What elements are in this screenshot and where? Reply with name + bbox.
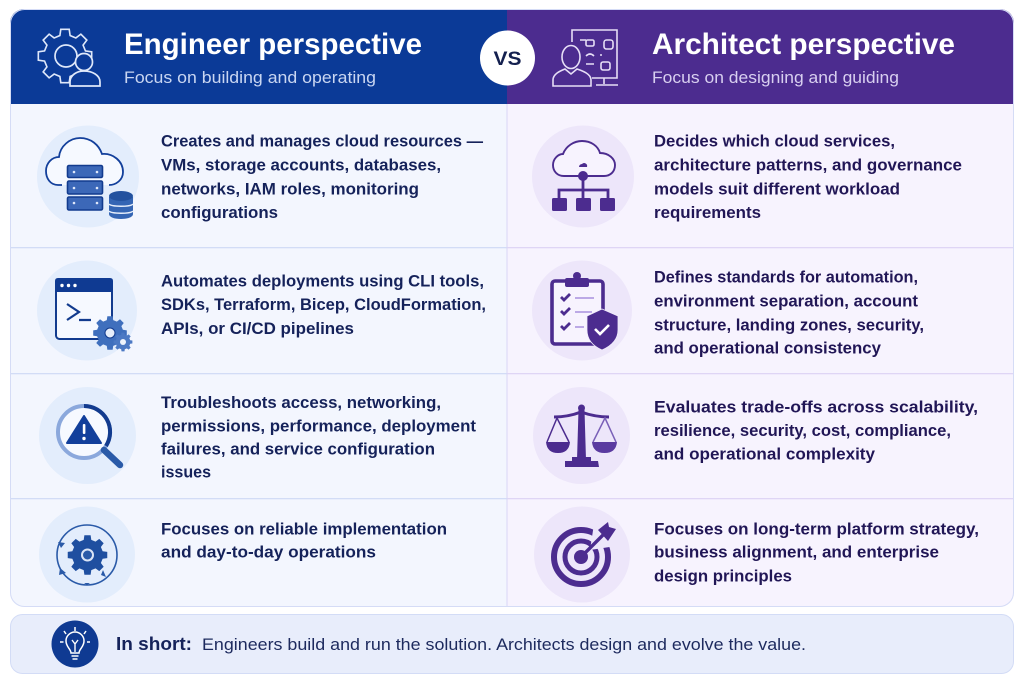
text: troubleshoots: failures, and service configuration (161, 440, 435, 458)
text: automates deployments: APIs, or CI/CD pipelines (161, 320, 354, 338)
icon: terminal window with gears (37, 260, 137, 360)
text: reliable implementation: Focuses on reliable implementation (161, 520, 447, 538)
text: creates and manages: Creates and manages cloud resources — (161, 132, 483, 150)
panel: engineer header (38, 28, 422, 87)
text: decides: architecture patterns, and governance (654, 156, 962, 174)
text: defines standards: and operational consistency (654, 340, 882, 358)
text: evaluates trade-offs (654, 398, 978, 464)
text: creates and manages: VMs, storage accounts, databases, (161, 156, 441, 174)
subheading: architect focus: Focus on designing and guiding (652, 69, 899, 87)
text: creates and manages (161, 132, 483, 222)
engineer row 2 (37, 260, 486, 360)
text: decides: models suit different workload (654, 180, 900, 198)
text: decides: Decides which cloud services, (654, 132, 895, 150)
text: creates and manages: configurations (161, 204, 278, 222)
text: reliable implementation: and day-to-day operations (161, 544, 376, 562)
architect row 2 (532, 260, 924, 360)
icon: cloud hierarchy (532, 126, 634, 228)
icon: magnifier with warning (39, 387, 136, 484)
icon: gear in cycle (39, 506, 135, 602)
text: automates deployments: SDKs, Terraform, Bicep, CloudFormation, (161, 296, 486, 314)
text: evaluates trade-offs: resilience, security, cost, compliance, (654, 422, 951, 440)
text: automates deployments (161, 272, 486, 338)
architect row 1 (532, 126, 962, 228)
text: summary sentence: Engineers build and run the solution. Architects design and evolve the value. (202, 636, 806, 654)
text: defines standards (654, 268, 924, 358)
text: creates and manages: networks, IAM roles, monitoring (161, 180, 419, 198)
architect row 4 (534, 506, 979, 602)
icon: balance scale (533, 387, 630, 484)
text: reliable implementation (161, 520, 447, 562)
text: evaluates trade-offs: Evaluates trade-offs across scalability, (654, 398, 978, 416)
engineer row 3 (39, 387, 477, 484)
heading: engineer perspective: Engineer perspective (124, 28, 422, 61)
text: evaluates trade-offs: and operational complexity (654, 446, 876, 464)
engineer row 1 (37, 126, 483, 228)
text: decides: requirements (654, 204, 761, 222)
text: long-term platform strategy: Focuses on long-term platform strategy, (654, 520, 979, 538)
text: in short label: In short: (116, 634, 192, 654)
icon: gear with engineer (38, 29, 100, 86)
text: troubleshoots: permissions, performance, deployment (161, 418, 477, 436)
engineer row 4 (39, 506, 447, 602)
text: long-term platform strategy: business alignment, and enterprise (654, 544, 939, 562)
icon: architect at board (553, 30, 618, 86)
text: defines standards: Defines standards for automation, (654, 268, 918, 286)
text: defines standards: structure, landing zones, security, (654, 316, 924, 334)
text: automates deployments: Automates deployments using CLI tools, (161, 272, 484, 290)
text: troubleshoots: Troubleshoots access, networking, (161, 394, 441, 412)
text: defines standards: environment separation, account (654, 292, 919, 310)
text: decides (654, 132, 962, 222)
icon: cloud servers and database (37, 126, 139, 228)
text: long-term platform strategy (654, 520, 979, 586)
text: troubleshoots (161, 394, 477, 482)
architect row 3 (533, 387, 978, 484)
icon: light bulb (52, 620, 98, 668)
callout: in short (10, 614, 1014, 674)
icon: target with arrow (534, 506, 630, 602)
icon: checklist with shield (532, 260, 632, 360)
panel: architect header (553, 28, 955, 87)
vs badge: VS (494, 49, 522, 70)
text: troubleshoots: issues (161, 464, 211, 482)
subheading: engineer focus: Focus on building and operating (124, 69, 376, 87)
heading: architect perspective: Architect perspective (652, 28, 955, 61)
text: long-term platform strategy: design principles (654, 568, 792, 586)
vs badge (480, 30, 535, 86)
